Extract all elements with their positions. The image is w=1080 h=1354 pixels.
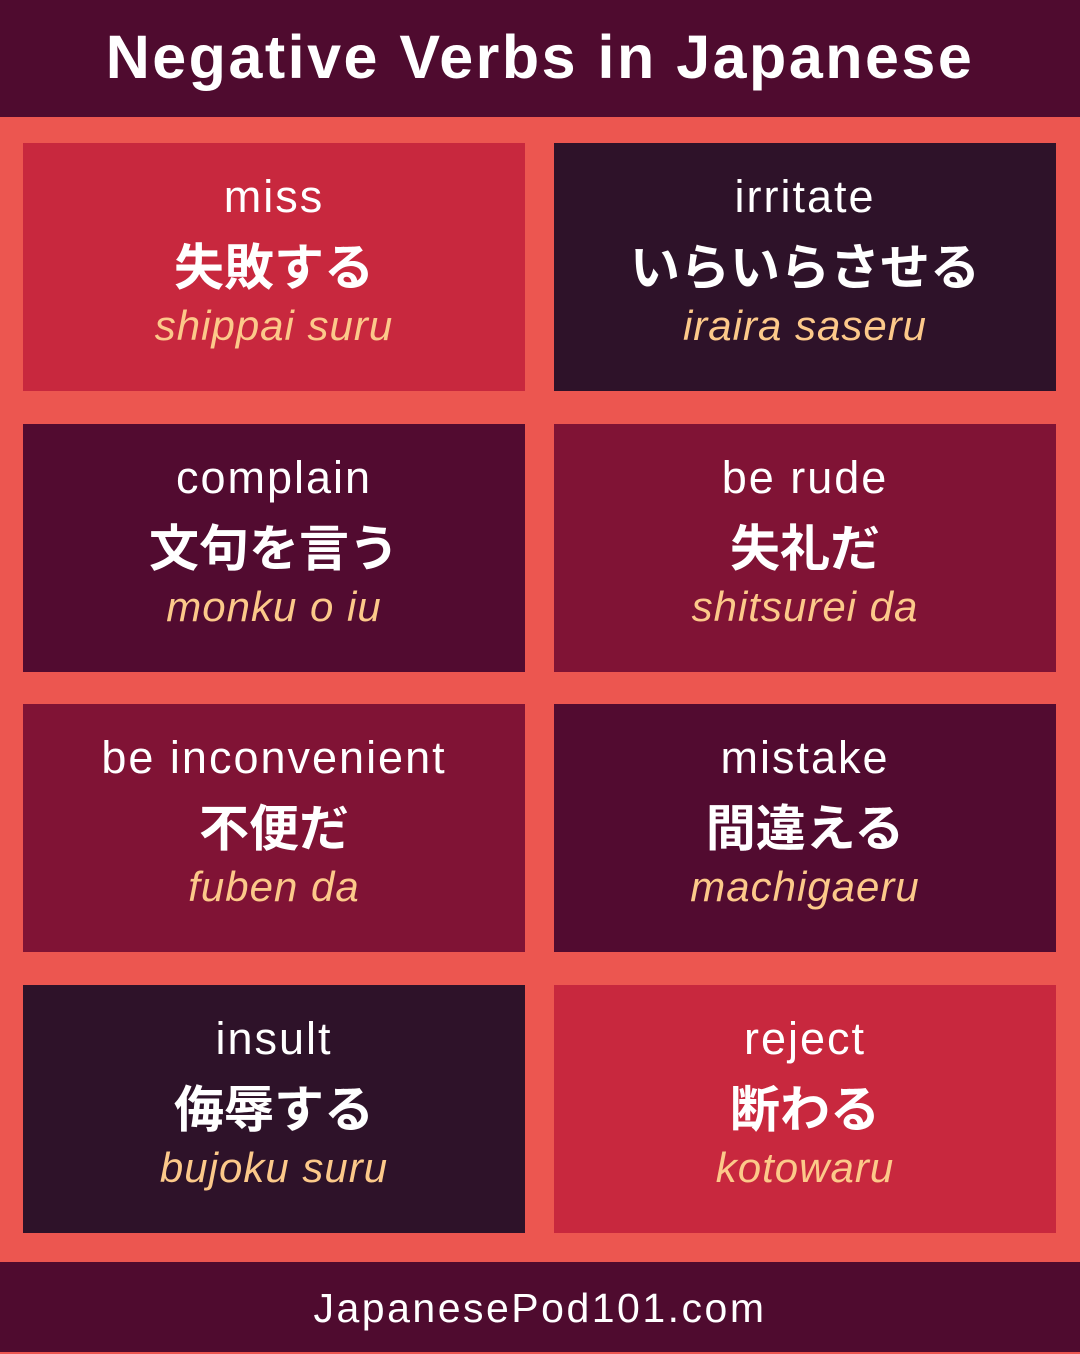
card: insult: insult	[215, 1013, 333, 1064]
card: reject: kotowaru	[716, 1144, 894, 1191]
card: be inconvenient	[23, 704, 525, 952]
card: insult: 侮辱する	[174, 1070, 374, 1142]
card: complain	[23, 424, 525, 672]
footer	[0, 1262, 1080, 1352]
card: be rude: shitsurei da	[692, 583, 918, 630]
card: irritate: iraira saseru	[683, 302, 927, 349]
card: irritate	[554, 143, 1056, 391]
card: miss: miss	[224, 171, 324, 222]
card: reject: reject	[744, 1013, 866, 1064]
footer: JapanesePod101.com	[313, 1285, 767, 1331]
card: mistake: machigaeru	[690, 863, 920, 910]
card: be rude: be rude	[722, 452, 888, 503]
card: be inconvenient: 不便だ	[199, 789, 349, 861]
card: complain: 文句を言う	[149, 509, 399, 581]
card: irritate: irritate	[734, 171, 876, 222]
card: mistake: mistake	[720, 732, 890, 783]
card: reject: 断わる	[730, 1070, 880, 1142]
card: complain: monku o iu	[166, 583, 382, 630]
card: insult	[23, 985, 525, 1233]
card: be rude: 失礼だ	[730, 509, 880, 581]
title: Negative Verbs in Japanese	[106, 23, 974, 91]
card: miss: 失敗する	[174, 228, 374, 300]
card: irritate: いらいらさせる	[630, 228, 980, 300]
card: reject	[554, 985, 1056, 1233]
card: insult: bujoku suru	[160, 1144, 388, 1191]
card: be inconvenient: fuben da	[188, 863, 360, 910]
card: mistake	[554, 704, 1056, 952]
card: mistake: 間違える	[706, 789, 904, 861]
card: be rude	[554, 424, 1056, 672]
card: complain: complain	[176, 452, 372, 503]
card: miss	[23, 143, 525, 391]
title	[0, 0, 1080, 117]
card: be inconvenient: be inconvenient	[101, 732, 447, 783]
card: miss: shippai suru	[155, 302, 393, 349]
